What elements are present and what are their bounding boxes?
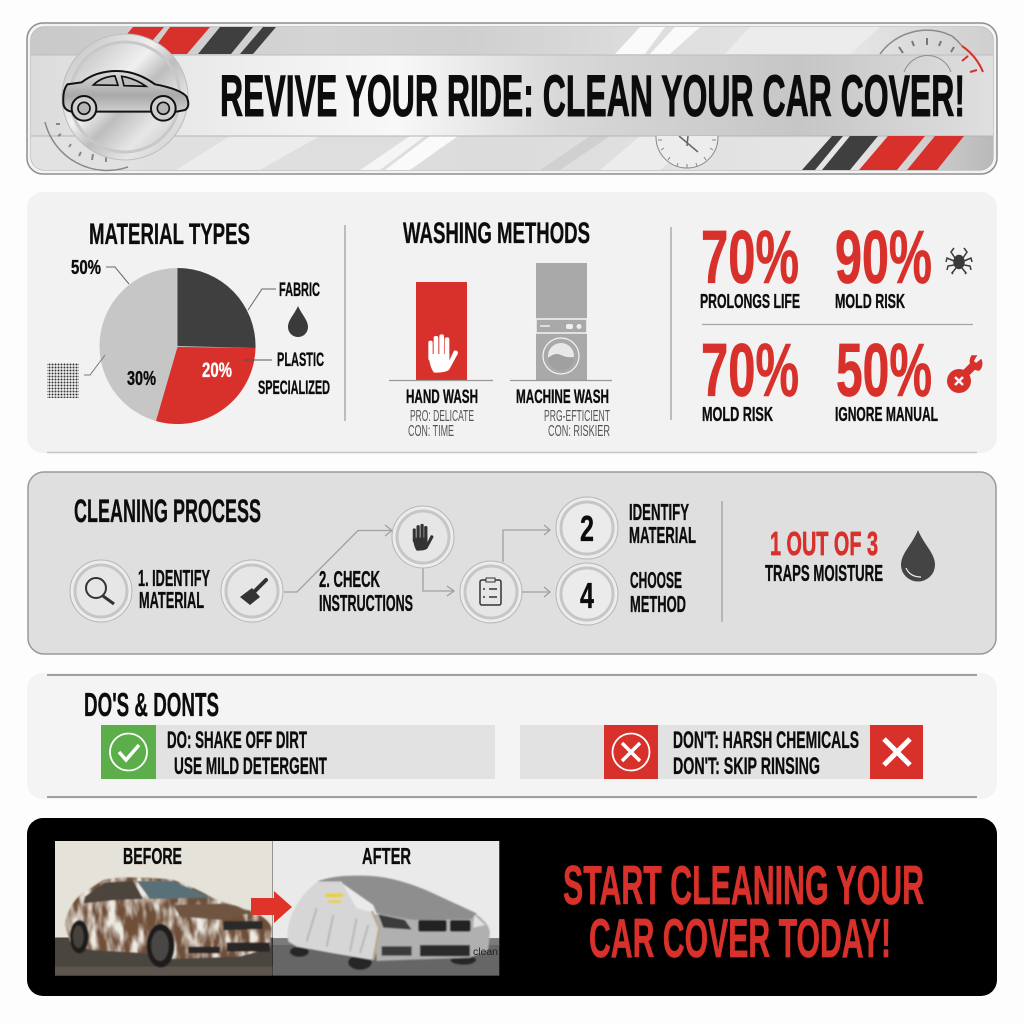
stat: 90% mold risk <box>835 215 932 313</box>
icon: broken wrench <box>947 356 982 393</box>
icon: red circled x <box>604 725 658 779</box>
don't row: DON'T: SKIP RINSING <box>673 753 820 780</box>
icon: red x <box>870 725 923 779</box>
step: checklist icon <box>460 561 522 623</box>
machine wash text: PRG-EFTICIENT <box>544 408 610 425</box>
stat: 70% prolongs life: PROLONGS LIFE <box>700 291 800 313</box>
step 2 label: 2. CHECK <box>319 566 380 592</box>
racing stripes: bottom right <box>802 136 964 170</box>
photo: before, dirty car <box>55 841 273 976</box>
flow arrows <box>284 525 550 597</box>
pie label: specialized: SPECIALIZED <box>258 378 330 399</box>
stat: 70% mold risk: MOLD RISK <box>702 404 773 426</box>
call to action text <box>563 854 924 969</box>
hand wash text: PRO: DELICATE <box>410 408 474 425</box>
heading: material types: MATERIAL TYPES <box>89 218 250 251</box>
machine wash text <box>516 387 610 440</box>
stat: 50% ignore manual: IGNORE MANUAL <box>835 404 938 426</box>
callout: 1 out of 3 traps moisture: TRAPS MOISTURE <box>765 560 883 586</box>
don't row: DON'T: HARSH CHEMICALS <box>673 727 859 754</box>
pie label: fabric: FABRIC <box>279 280 320 301</box>
step number 4: 4 <box>580 575 594 616</box>
do row: USE MILD DETERGENT <box>174 753 327 780</box>
heading: washing methods: WASHING METHODS <box>403 217 590 250</box>
hand wash text: HAND WASH <box>406 387 478 408</box>
step 1 label: 1. IDENTIFY <box>138 565 210 591</box>
stat: 90% mold risk: MOLD RISK <box>835 291 905 313</box>
stat: 70% mold risk <box>701 328 799 426</box>
stat: 50% ignore manual: 50% <box>836 328 932 412</box>
do row <box>101 725 495 780</box>
panel: do's and don'ts <box>27 673 997 799</box>
icon: car emblem <box>62 34 188 160</box>
icon: mold spider <box>946 248 972 274</box>
icon: green check <box>101 725 156 779</box>
pie label: plastic <box>244 350 324 371</box>
stat: 90% mold risk: 90% <box>835 215 932 299</box>
don't row <box>520 725 923 780</box>
hand wash text: CON: TIME <box>408 423 454 440</box>
step number 2: 2 <box>580 508 594 549</box>
icon: hand <box>428 334 458 373</box>
icon: water drop <box>288 306 308 337</box>
panel: cleaning process <box>28 472 996 654</box>
pie label: 20%: 20% <box>202 359 232 382</box>
arrow: before to after <box>251 891 292 923</box>
gauge: bottom left <box>45 122 128 171</box>
label: identify material <box>629 499 696 548</box>
panel: statistics row <box>27 192 997 453</box>
hand wash text <box>406 387 478 440</box>
step number 2 <box>556 497 618 559</box>
panel: call to action <box>27 818 997 996</box>
step 2 label <box>319 566 413 616</box>
label: choose method: CHOOSE <box>630 567 682 593</box>
label: choose method: METHOD <box>630 591 686 617</box>
callout: 1 out of 3 traps moisture <box>765 525 883 586</box>
step 1 label <box>138 565 210 613</box>
gauge: top right <box>880 30 983 72</box>
pie label: plastic: PLASTIC <box>277 350 324 371</box>
pie label: 50%: 50% <box>71 257 101 279</box>
callout: 1 out of 3 traps moisture: 1 OUT OF 3 <box>770 525 878 562</box>
machine wash text: MACHINE WASH <box>516 387 609 408</box>
stat: 50% ignore manual <box>835 328 938 426</box>
step: hand icon <box>392 506 454 568</box>
pie label: fabric <box>248 280 320 310</box>
clock dial: bottom centre <box>656 136 718 168</box>
step: search icon <box>70 560 132 622</box>
stat: 70% mold risk: 70% <box>701 328 799 412</box>
icon: fabric texture swatch <box>47 355 105 398</box>
label: before: BEFORE <box>123 843 182 869</box>
step 2 label: INSTRUCTIONS <box>319 590 413 616</box>
bar: hand wash <box>389 282 493 380</box>
photo: after, covered car <box>273 841 499 976</box>
heading: cleaning process: CLEANING PROCESS <box>74 493 261 529</box>
step number 4 <box>556 563 618 625</box>
label: after: AFTER <box>362 843 411 869</box>
step 1 label: MATERIAL <box>139 587 204 613</box>
racing stripes: top left <box>110 27 276 54</box>
label: identify material: MATERIAL <box>629 522 696 548</box>
pie chart: materials <box>100 268 256 424</box>
machine wash text: CON: RISKIER <box>548 423 610 440</box>
stat: 70% prolongs life: 70% <box>701 215 799 299</box>
step: brush icon <box>221 560 283 622</box>
do row: DO: SHAKE OFF DIRT <box>167 727 307 754</box>
label: clean watermark: clean <box>473 947 498 958</box>
stat: 70% prolongs life <box>700 215 800 313</box>
pie label: 50% <box>71 257 129 284</box>
header banner <box>27 23 997 174</box>
icon: moisture drop <box>901 530 935 582</box>
heading: do's and don'ts: DO'S & DONTS <box>84 686 219 723</box>
label: identify material: IDENTIFY <box>629 499 689 525</box>
pie label: 30%: 30% <box>127 368 156 390</box>
bar: machine wash <box>510 263 612 380</box>
label: choose method <box>630 567 686 617</box>
